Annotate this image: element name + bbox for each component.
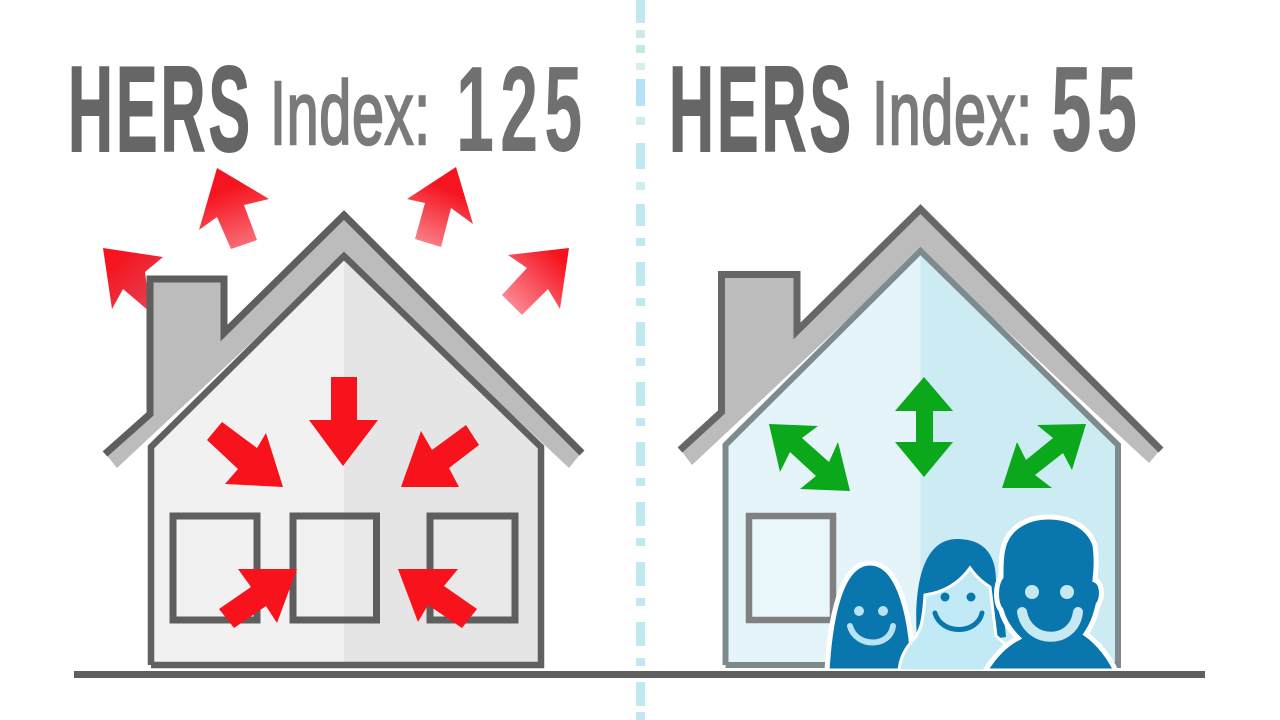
heading: HERS Index 125: Index: bbox=[270, 64, 431, 164]
heading: HERS Index 55 bbox=[669, 40, 1142, 178]
person: man bbox=[985, 517, 1116, 671]
heading: HERS Index 55: 55 bbox=[1051, 42, 1142, 178]
heading: HERS Index 125 bbox=[68, 40, 588, 177]
family of three bbox=[827, 517, 1116, 671]
ground line bbox=[74, 671, 1205, 678]
arrows: air leaking into the house bbox=[207, 377, 479, 628]
windows bbox=[173, 516, 515, 620]
heading: HERS Index 55: Index: bbox=[872, 64, 1033, 164]
roof and chimney bbox=[680, 209, 1161, 465]
walls bbox=[726, 251, 1118, 665]
person: woman bbox=[899, 539, 1012, 671]
walls bbox=[151, 256, 541, 665]
arrows: balanced green air flow bbox=[769, 377, 1086, 491]
house: leaky home bbox=[105, 215, 582, 665]
heading: HERS Index 125: HERS bbox=[68, 40, 253, 177]
divider: dashed centre line bbox=[636, 0, 645, 720]
window bbox=[749, 516, 833, 620]
heading: HERS Index 125: 125 bbox=[456, 40, 588, 177]
roof and chimney bbox=[105, 215, 582, 468]
heading: HERS Index 55: HERS bbox=[669, 40, 854, 177]
person: child bbox=[827, 563, 913, 671]
house: efficient home bbox=[680, 209, 1161, 665]
arrows: heat escaping through the roof bbox=[103, 167, 569, 315]
